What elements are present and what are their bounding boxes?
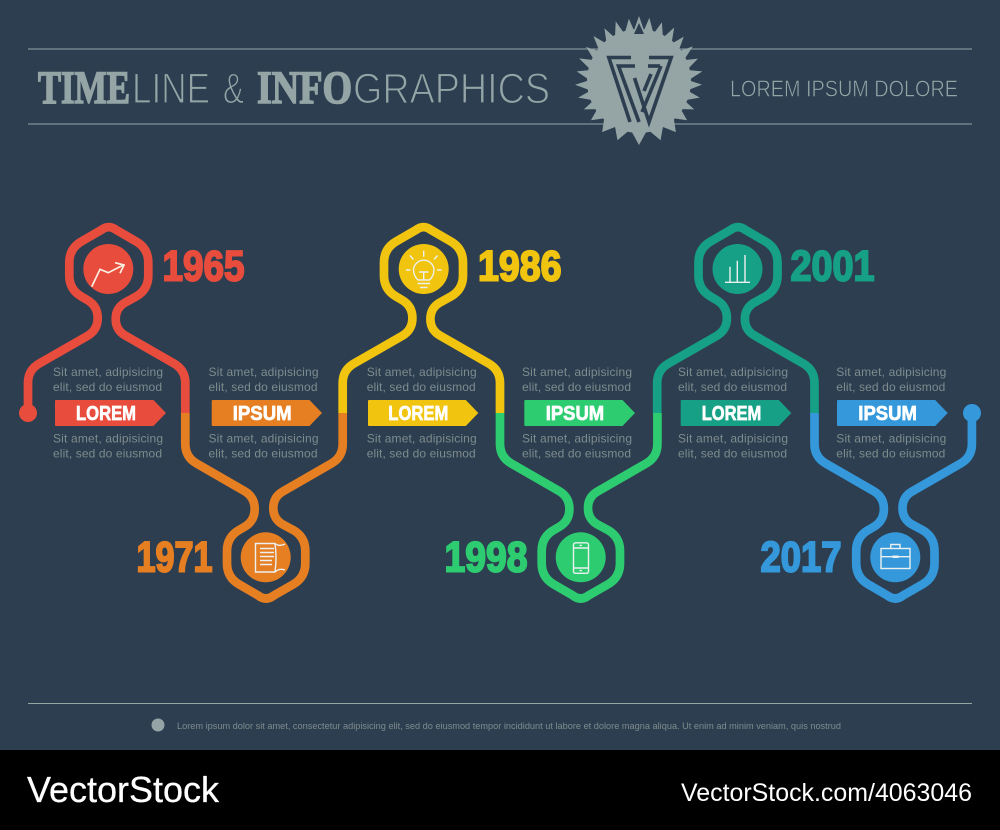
text block: column 5 top: Sit amet, adipisicing [678,365,788,379]
arrow label: LOREM yellow [368,400,478,426]
arrow label: IPSUM orange [212,400,322,426]
segment: green [500,413,657,598]
arrow label: IPSUM blue [837,400,948,426]
text block: column 2 top: elit, sed do eiusmod [208,380,318,394]
text block: column 4 bottom [522,432,632,460]
text block: column 6 top: Sit amet, adipisicing [836,365,946,379]
text block: column 4 bottom: elit, sed do eiusmod [522,446,631,460]
text block: column 3 bottom: Sit amet, adipisicing [367,432,477,446]
text block: column 4 bottom: Sit amet, adipisicing [522,432,632,446]
arrow label: LOREM teal [681,400,791,426]
segment: teal [657,227,814,413]
text block: column 3 bottom [367,432,477,460]
title: & [223,65,244,113]
year 2001: 2001 [790,242,874,290]
segment: blue [814,404,981,598]
title: GRAPHICS [353,65,550,113]
year 1986: 1986 [478,242,562,290]
text block: column 2 top: Sit amet, adipisicing [208,365,318,379]
text block: column 1 bottom: Sit amet, adipisicing [53,432,163,446]
text block: column 6 bottom: Sit amet, adipisicing [836,432,946,446]
text block: column 1 top: elit, sed do eiusmod [53,380,162,394]
watermark: VectorStock logo: VectorStock [27,769,220,810]
arrow label: LOREM teal: LOREM [702,403,761,425]
year 1965: 1965 [162,242,244,290]
title: INFO [257,62,352,114]
footnote: Lorem ipsum dolor sit amet, consectetur adipisicing elit, sed do eiusmod tempor incididunt ut labore et dolore magna aliqua. Ut enim ad minim veniam, quis nostrud [177,721,841,732]
icon: smartphone [556,532,606,582]
text block: column 4 top [522,365,632,394]
title: LINE [132,65,210,113]
text block: column 3 bottom: elit, sed do eiusmod [367,446,476,460]
year 2017: 2017 [760,534,842,582]
segment: yellow [343,227,500,413]
arrow label: IPSUM green [524,400,635,426]
arrow label: LOREM yellow: LOREM [388,403,448,425]
text block: column 1 bottom: elit, sed do eiusmod [53,446,162,460]
text block: column 6 top: elit, sed do eiusmod [836,380,945,394]
icon: briefcase [870,532,920,582]
segment: red [19,227,185,422]
text block: column 5 top: elit, sed do eiusmod [678,380,787,394]
text block: column 3 top: Sit amet, adipisicing [367,365,477,379]
text block: column 6 bottom [836,432,946,460]
text block: column 4 top: elit, sed do eiusmod [522,380,631,394]
text block: column 2 top [208,365,318,394]
icon: bar chart [712,244,762,294]
watermark: image id: VectorStock.com/4063046 [681,779,972,807]
text block: column 6 bottom: elit, sed do eiusmod [836,446,945,460]
text block: column 3 top: elit, sed do eiusmod [367,380,476,394]
text block: column 5 bottom [678,432,788,460]
icon: rising chart arrow [83,244,133,294]
arrow label: LOREM red: LOREM [76,403,136,425]
title [38,62,550,114]
year 1998: 1998 [444,534,528,582]
year 1971: 1971 [136,534,212,582]
arrow label: IPSUM green: IPSUM [546,403,604,425]
text block: column 2 bottom: elit, sed do eiusmod [208,446,318,460]
subtitle: LOREM IPSUM DOLORE [730,76,958,102]
text block: column 1 top: Sit amet, adipisicing [53,365,163,379]
icon: light bulb [399,244,449,294]
text block: column 6 top [836,365,946,394]
text block: column 2 bottom: Sit amet, adipisicing [208,432,318,446]
segment: orange [185,413,343,598]
title: TIME [38,62,130,114]
icon: document [241,532,291,582]
text block: column 5 bottom: elit, sed do eiusmod [678,446,787,460]
arrow label: IPSUM orange: IPSUM [233,403,292,425]
text block: column 4 top: Sit amet, adipisicing [522,365,632,379]
logo badge [575,16,703,145]
text block: column 1 top [53,365,163,394]
arrow label: IPSUM blue: IPSUM [858,403,917,425]
text block: column 2 bottom [208,432,318,460]
arrow label: LOREM red [55,400,166,426]
text block: column 1 bottom [53,432,163,460]
text block: column 5 top [678,365,788,394]
text block: column 5 bottom: Sit amet, adipisicing [678,432,788,446]
timeline track [19,227,981,598]
text block: column 3 top [367,365,477,394]
